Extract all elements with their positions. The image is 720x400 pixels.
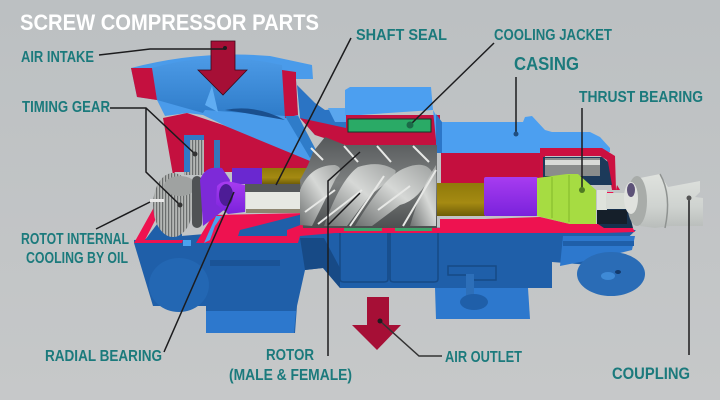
label: coupling (612, 196, 692, 383)
cooling jacket cover (345, 87, 435, 145)
label: rotor: ROTOR (266, 347, 314, 364)
purple bearing right (484, 177, 538, 216)
label: shaft seal: SHAFT SEAL (356, 27, 447, 44)
label: cooling jacket: COOLING JACKET (494, 27, 612, 44)
label: shaft seal (276, 27, 447, 185)
casing (433, 110, 620, 190)
arrow: air intake (198, 41, 247, 95)
coupling (624, 174, 703, 228)
lower casing and feet (134, 226, 636, 333)
radial bearing, purple (200, 140, 245, 226)
rotors (300, 137, 437, 228)
label: casing (514, 54, 579, 136)
gear housing blue detail (184, 135, 204, 172)
label: thrust bearing: THRUST BEARING (579, 89, 703, 106)
coupling wheel (577, 252, 645, 296)
shaft left (245, 184, 308, 213)
label: rotor internal cooling: ROTOT INTERNAL (21, 231, 129, 248)
label: timing gear (22, 99, 198, 208)
red cut section, gear housing (163, 113, 440, 175)
label: rotor (229, 152, 360, 384)
compressor cutaway illustration (131, 54, 703, 333)
upper timing gear (184, 135, 204, 175)
label: rotor internal cooling: COOLING BY OIL (26, 250, 128, 267)
label: timing gear: TIMING GEAR (22, 99, 110, 116)
label: air outlet: AIR OUTLET (445, 349, 522, 366)
olive bearing right (437, 183, 485, 216)
label: cooling jacket (406, 27, 612, 128)
label: air intake (21, 46, 227, 66)
intake housing (131, 54, 350, 166)
lower timing gear (153, 173, 202, 237)
olive seal left (258, 168, 310, 184)
purple neck (232, 168, 262, 184)
arrow: air outlet (352, 297, 401, 350)
label: rotor internal cooling (21, 199, 164, 267)
title: SCREW COMPRESSOR PARTS (20, 10, 319, 35)
lower red section (134, 192, 635, 246)
label: radial bearing (45, 192, 234, 365)
label: coupling: COUPLING (612, 364, 690, 383)
label: air intake: AIR INTAKE (21, 49, 94, 66)
thrust bearing, green (537, 174, 596, 224)
label: rotor: (MALE & FEMALE) (229, 367, 352, 384)
label: thrust bearing (579, 89, 703, 193)
label: radial bearing: RADIAL BEARING (45, 348, 162, 365)
shaft right (597, 190, 636, 224)
label: air outlet (378, 318, 522, 366)
label: casing: CASING (514, 54, 579, 74)
